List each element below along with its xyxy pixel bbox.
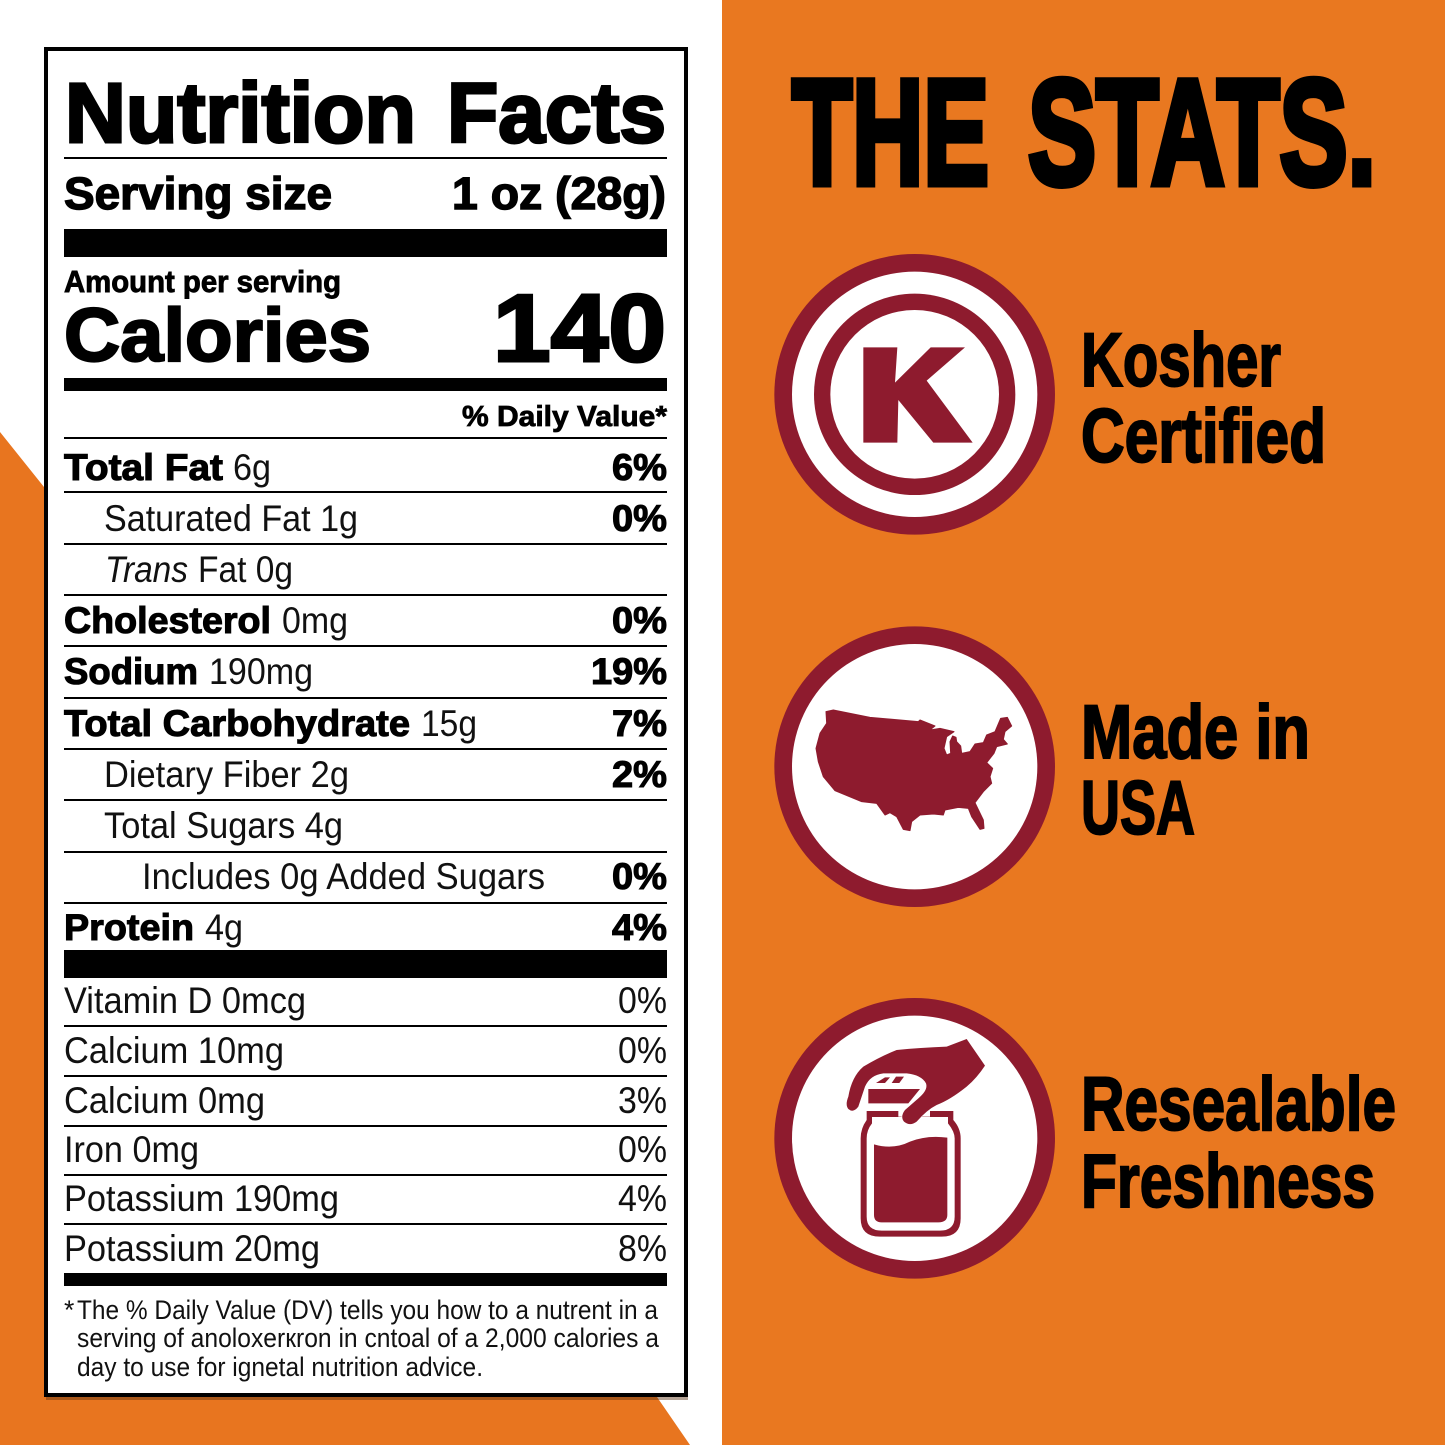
row: added sugars: 0% — [612, 856, 667, 897]
row: calcium 0mg: Calcium 0mg — [64, 1080, 265, 1121]
footnote — [64, 1295, 659, 1382]
label: Made in USA: USA — [1081, 766, 1195, 851]
footnote: * — [64, 1295, 74, 1325]
serving size row: Serving size — [64, 168, 332, 219]
row: protein — [64, 907, 667, 948]
row: cholesterol: Cholesterol — [64, 600, 271, 641]
row: potassium 190mg: Potassium 190mg — [64, 1178, 339, 1219]
row: saturated fat — [104, 498, 667, 539]
row: calcium 10mg — [64, 1030, 667, 1071]
row: protein: Protein — [64, 907, 194, 948]
row: calcium 0mg: 3% — [618, 1080, 667, 1121]
row: cholesterol: 0mg — [282, 600, 348, 641]
row: protein: 4g — [205, 907, 243, 948]
row: potassium 20mg: 8% — [618, 1228, 667, 1269]
calories row: Calories — [64, 293, 371, 377]
footnote: day to use for ignetal nutrition advice. — [77, 1352, 483, 1382]
icon: USA map badge — [774, 626, 1055, 907]
row: sodium: 190mg — [209, 651, 313, 692]
row: vitamin d: 0% — [618, 980, 667, 1021]
label: Kosher Certified: Certified — [1081, 394, 1326, 479]
row: potassium 20mg — [64, 1228, 667, 1269]
background: orange diagonal shape — [0, 432, 690, 1445]
row: sodium: Sodium — [64, 651, 198, 692]
row: cholesterol — [64, 600, 667, 641]
row: iron: Iron 0mg — [64, 1129, 199, 1170]
row: cholesterol: 0% — [612, 600, 667, 641]
heading: THE STATS. — [792, 48, 1376, 216]
row: saturated fat: Saturated Fat 1g — [104, 498, 358, 539]
row: trans fat: Fat 0g — [198, 549, 293, 590]
row: total carbohydrate: 15g — [421, 703, 477, 744]
heading: Nutrition Facts: Nutrition — [65, 66, 416, 160]
background: right orange panel — [722, 0, 1445, 1445]
calories row: 140 — [493, 275, 666, 382]
row: dietary fiber — [104, 754, 667, 795]
icon: resealable jar badge — [774, 998, 1055, 1279]
row: sodium: 19% — [591, 651, 667, 692]
calories row — [64, 275, 666, 382]
row: iron — [64, 1129, 667, 1170]
row: vitamin d: Vitamin D 0mcg — [64, 980, 306, 1021]
label: Made in USA: Made in — [1081, 690, 1310, 775]
row: potassium 190mg — [64, 1178, 667, 1219]
footnote: The % Daily Value (DV) tells you how to a nutrent in a — [77, 1295, 658, 1325]
row: trans fat: Trans — [105, 549, 188, 590]
label: Resealable Freshness — [1081, 1062, 1396, 1224]
row: trans fat — [105, 549, 293, 590]
row: total fat: 6g — [233, 447, 271, 488]
row: total fat: 6% — [612, 447, 667, 488]
panel: nutrition facts label — [46, 49, 686, 1395]
row: potassium 20mg: Potassium 20mg — [64, 1228, 320, 1269]
serving size row — [64, 168, 666, 219]
heading: THE STATS.: THE — [792, 48, 989, 216]
row: saturated fat: 0% — [612, 498, 667, 539]
label: Kosher Certified — [1081, 318, 1326, 479]
panel shadow — [46, 1392, 688, 1400]
row: dietary fiber: Dietary Fiber 2g — [104, 754, 349, 795]
serving size row: 1 oz (28g) — [452, 168, 666, 219]
amount per serving text: Amount per serving — [64, 264, 341, 299]
row: total sugars: Total Sugars 4g — [104, 805, 343, 846]
icon: kosher certified badge — [774, 254, 1055, 535]
row: added sugars: Includes 0g Added Sugars — [142, 856, 545, 897]
heading: Nutrition Facts — [65, 66, 666, 160]
row: total carbohydrate — [64, 703, 667, 744]
row: dietary fiber: 2% — [612, 754, 667, 795]
row: vitamin d — [64, 980, 667, 1021]
row: calcium 10mg: 0% — [618, 1030, 667, 1071]
footnote: serving of anoloxerкron in cntoal of a 2,000 calories a — [77, 1323, 659, 1353]
heading: Nutrition Facts: Facts — [447, 66, 666, 160]
label: Kosher Certified: Kosher — [1081, 318, 1281, 403]
row: protein: 4% — [612, 907, 667, 948]
row: sodium — [64, 651, 667, 692]
row: total fat: Total Fat — [64, 447, 223, 488]
row: potassium 190mg: 4% — [618, 1178, 667, 1219]
row: total carbohydrate: 7% — [612, 703, 667, 744]
row: calcium 0mg — [64, 1080, 667, 1121]
label: Made in USA — [1081, 690, 1310, 851]
row: calcium 10mg: Calcium 10mg — [64, 1030, 284, 1071]
row: total fat — [64, 447, 667, 488]
row: iron: 0% — [618, 1129, 667, 1170]
daily value header: % Daily Value* — [462, 401, 668, 433]
row: total carbohydrate: Total Carbohydrate — [64, 703, 410, 744]
